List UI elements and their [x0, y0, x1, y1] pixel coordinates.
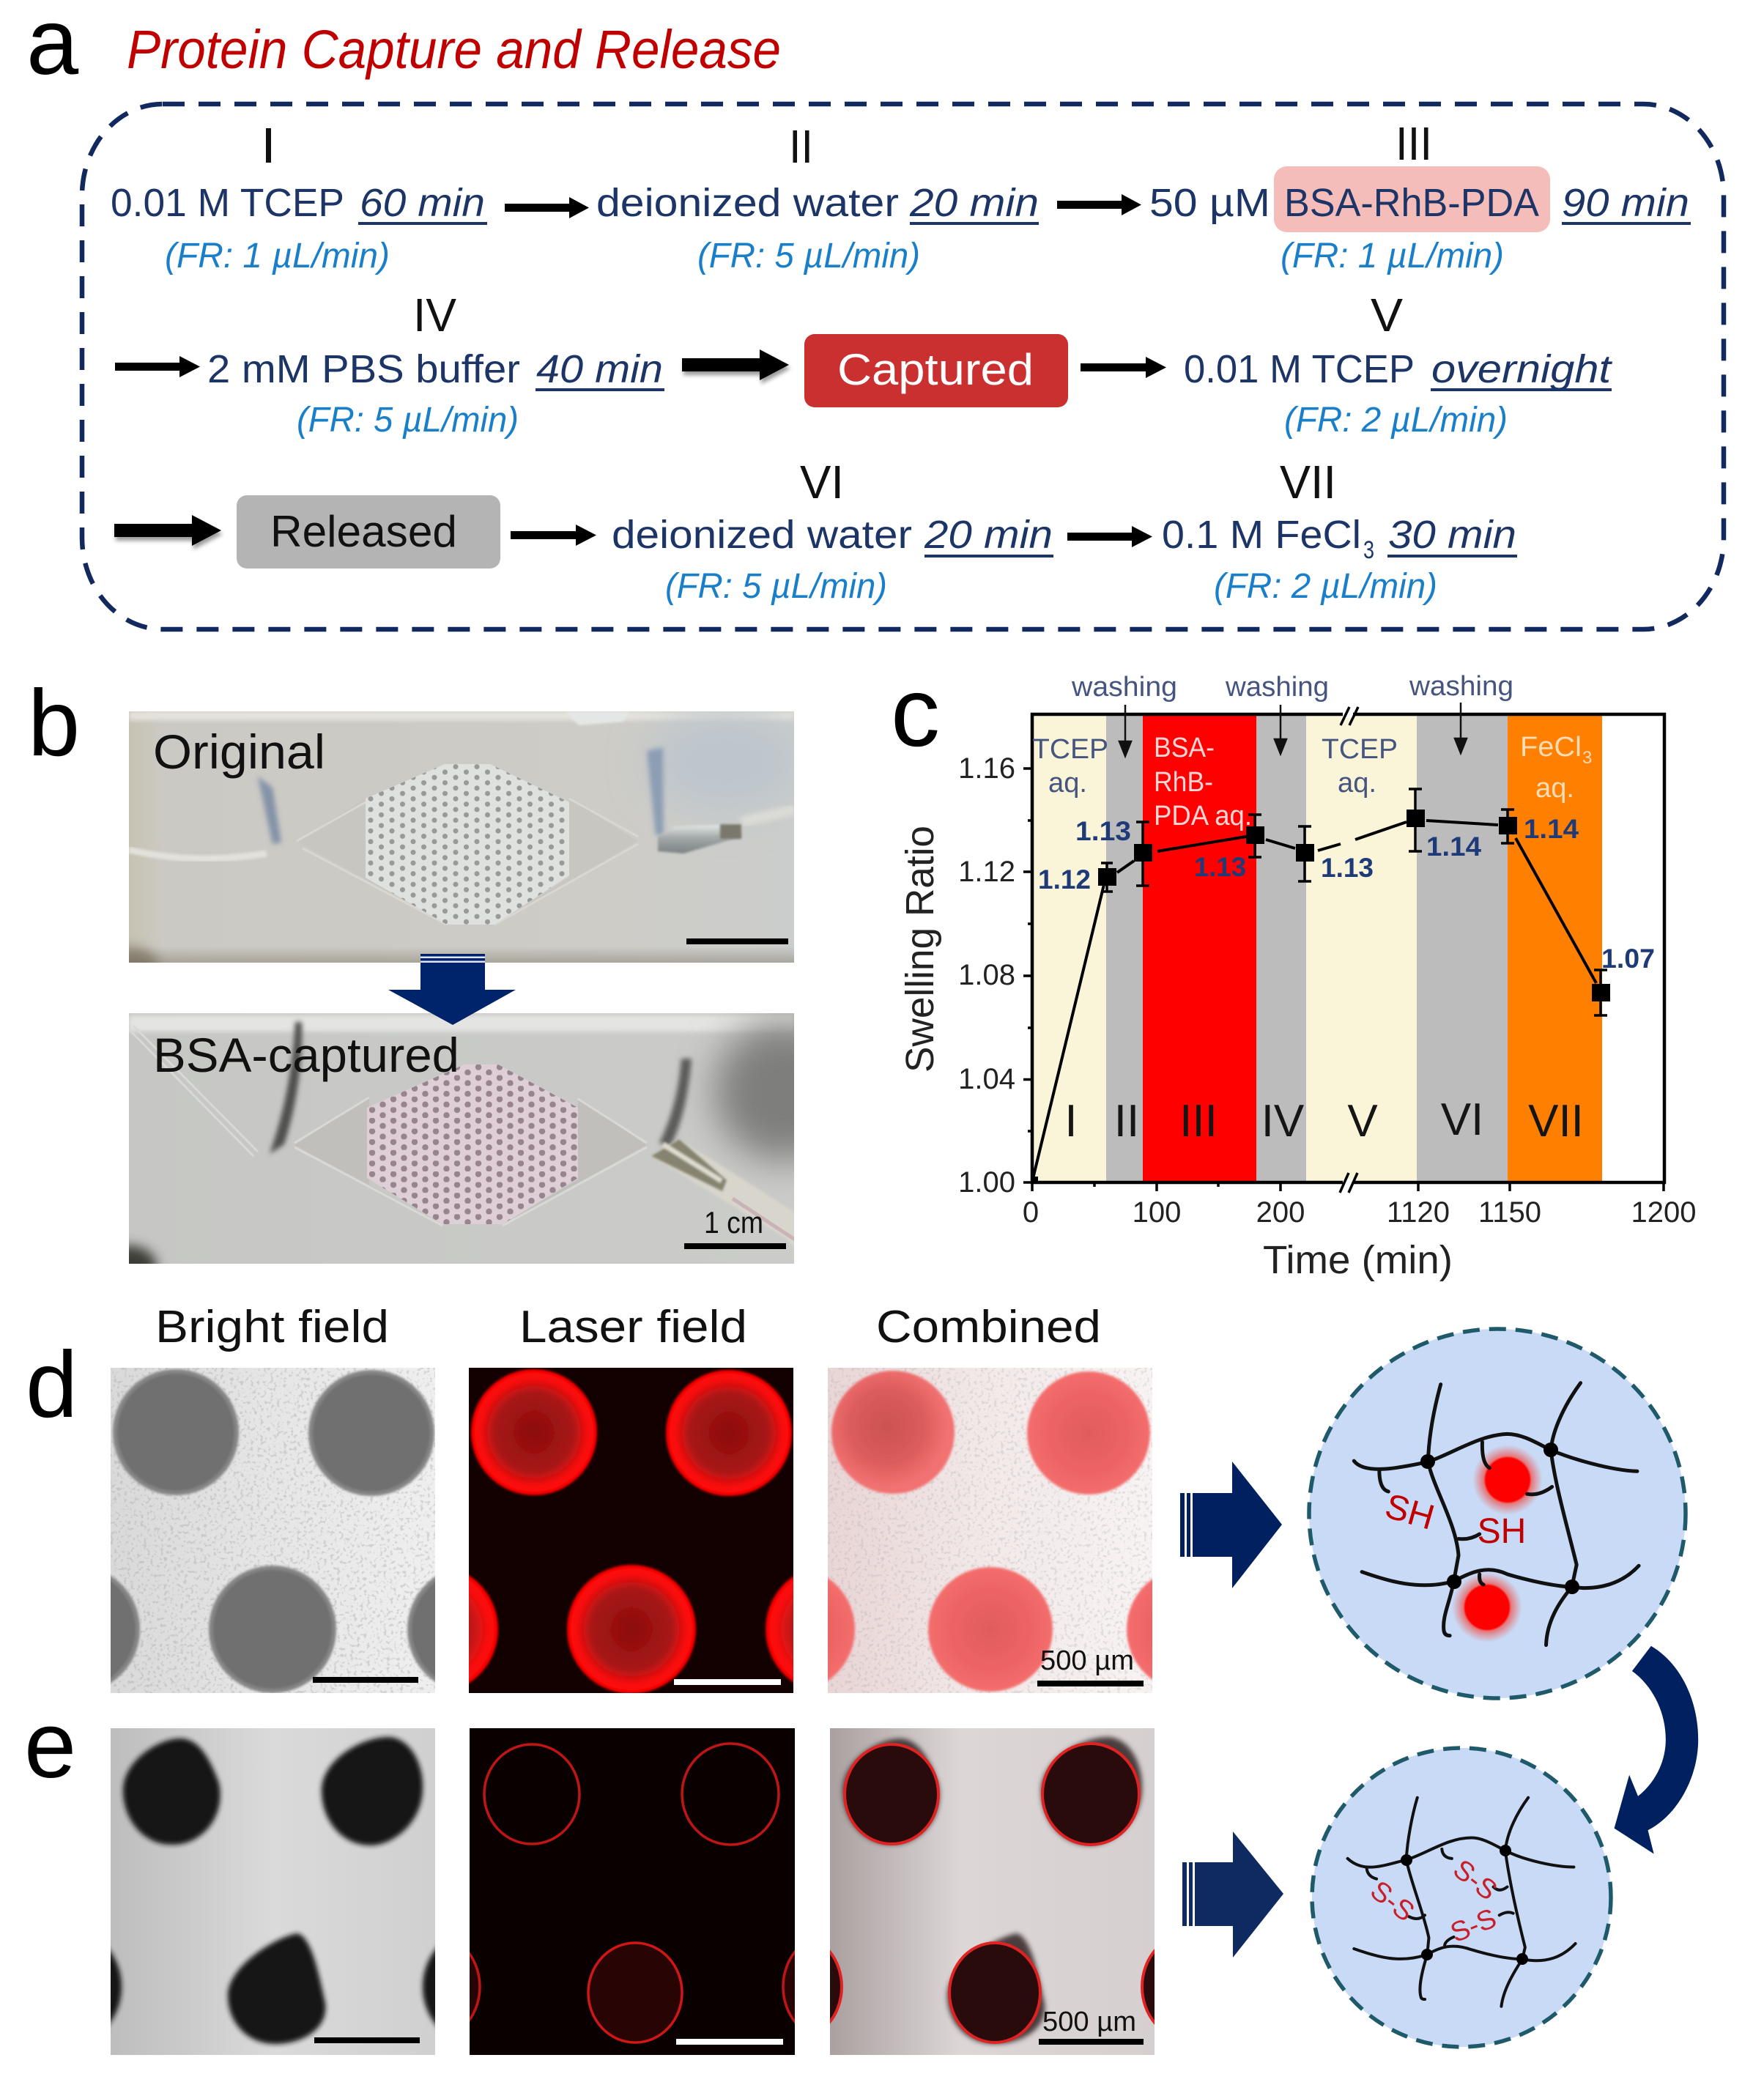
x axis tick labels: 0: [1023, 1196, 1039, 1229]
scale bar: [686, 938, 788, 944]
data value labels: 1.13: [1194, 852, 1246, 882]
y axis tick labels: 1.04: [958, 1063, 1015, 1095]
step VI: (FR: 5 µL/min): [665, 567, 887, 606]
step II: deionized water: [596, 181, 899, 225]
network circle: [1309, 1329, 1686, 1698]
y axis title: Swelling Ratio: [898, 826, 942, 1073]
step II: (FR: 5 µL/min): [697, 237, 920, 275]
polymer chains: [1348, 1798, 1576, 2007]
y axis tick labels: 1.16: [958, 752, 1015, 785]
band annotations: TCEP: [1032, 734, 1108, 765]
thiol label 1: SH: [1381, 1486, 1439, 1538]
panel b: device photographs: [28, 671, 853, 1286]
arrow to V: [1081, 357, 1166, 378]
data value labels: 1.12: [1038, 864, 1091, 895]
arrow to VI: [511, 525, 596, 546]
step III: [1149, 117, 1691, 275]
protein glow 2: [1452, 1572, 1522, 1642]
step IV: (FR: 5 µL/min): [297, 401, 519, 440]
stage numerals: VI: [1441, 1095, 1483, 1145]
stage numerals: I: [1064, 1096, 1078, 1147]
thiol label 2: SH: [1478, 1512, 1526, 1551]
step I: (FR: 1 µL/min): [165, 237, 390, 275]
panel label e: e: [24, 1693, 76, 1798]
stage numerals: III: [1179, 1096, 1218, 1147]
data value labels: 1.07: [1601, 944, 1655, 974]
step IV: 40 min: [536, 347, 663, 391]
column header: Bright field: Bright field: [155, 1302, 389, 1352]
step V: (FR: 2 µL/min): [1284, 401, 1508, 440]
network circle: [1312, 1748, 1611, 2047]
step VI: deionized water: [612, 513, 912, 557]
data value labels: 1.13: [1321, 853, 1374, 883]
polymer chains: [1354, 1383, 1639, 1645]
step III: III: [1396, 117, 1432, 170]
step VII: 3: [1363, 536, 1374, 564]
thick arrow to Captured: [682, 349, 789, 380]
step III: 90 min: [1562, 181, 1689, 225]
scale bar: [314, 2037, 420, 2043]
x axis tick labels: 1150: [1478, 1196, 1541, 1229]
data value labels: 1.14: [1426, 832, 1481, 862]
step I: 0.01 M TCEP: [111, 181, 344, 225]
band annotations: aq.: [1048, 768, 1087, 799]
disulfide label 2: S-S: [1447, 1853, 1502, 1907]
step IV: 2 mM PBS buffer: [207, 347, 520, 391]
stage numerals: IV: [1261, 1096, 1305, 1147]
y axis tick labels: 1.12: [958, 856, 1015, 888]
scale bar: [1039, 2039, 1144, 2045]
arrow into IV: [115, 356, 200, 377]
scale bar: [1037, 1681, 1144, 1686]
x axis title: Time (min): [1263, 1238, 1453, 1282]
scale bar: [684, 1243, 786, 1249]
Captured badge: Captured: [837, 345, 1034, 394]
label: Original: Original: [153, 725, 325, 779]
column header: Combined: Combined: [876, 1302, 1101, 1352]
stage numerals: [1064, 1095, 1584, 1147]
data series: [1032, 789, 1610, 1182]
y axis tick labels: [958, 752, 1015, 1199]
x axis tick labels: 100: [1133, 1196, 1181, 1229]
micrograph: bright field d: [111, 1368, 435, 1693]
step V: [1184, 289, 1612, 440]
Released badge: Released: [270, 507, 457, 556]
data value labels: [1038, 814, 1655, 974]
schematic: swollen network with captured protein: [1309, 1329, 1686, 1698]
crosslink nodes: [1401, 1845, 1528, 1965]
curved arrow: oxidation to disulfide: [1615, 1646, 1698, 1853]
scale bar: [674, 1679, 781, 1685]
photo: original device: [129, 711, 794, 963]
washing callouts: washing: [1225, 672, 1329, 703]
micrograph: laser field e: [470, 1728, 795, 2055]
step III: BSA-RhB-PDA: [1284, 181, 1539, 225]
band annotations: aq.: [1535, 773, 1574, 804]
stage numerals: VII: [1528, 1096, 1584, 1147]
column header: Laser field: Laser field: [519, 1302, 747, 1352]
micrograph: combined e: [830, 1728, 1155, 2055]
scale bar: [313, 1677, 418, 1683]
step II: II: [789, 120, 813, 173]
step VI: [612, 456, 1053, 606]
step VII: VII: [1280, 456, 1336, 508]
panel label d: d: [26, 1333, 78, 1437]
band annotations: [1032, 732, 1592, 832]
stage numerals: II: [1114, 1096, 1139, 1147]
step VI: 20 min: [924, 513, 1053, 557]
arrow: row d to network: [1180, 1462, 1282, 1588]
band annotations: aq.: [1338, 768, 1376, 799]
step VII: (FR: 2 µL/min): [1214, 567, 1437, 606]
x axis tick labels: [1023, 1196, 1696, 1229]
Captured badge: [804, 334, 1068, 407]
disulfide label 3: S-S: [1446, 1903, 1501, 1949]
panel a: protein capture and release workflow: [26, 0, 1724, 629]
step VII: [1162, 456, 1517, 606]
step IV: [207, 289, 664, 440]
band annotations: 3: [1582, 748, 1592, 768]
y axis tick labels: 1.08: [958, 959, 1015, 991]
band annotations: TCEP: [1322, 734, 1398, 765]
title: Protein Capture and Release: [127, 19, 781, 80]
panel d: captured micrographs: [15, 1333, 1251, 1694]
disulfide label 1: S-S: [1364, 1875, 1420, 1928]
band annotations: FeCl: [1520, 732, 1582, 763]
x axis tick labels: 1200: [1631, 1196, 1696, 1229]
step VI: VI: [800, 456, 844, 508]
thick arrow to Released: [114, 515, 221, 546]
step V: V: [1371, 289, 1403, 341]
arrow to VII: [1067, 526, 1152, 547]
panel label c: c: [891, 658, 940, 767]
step II: [596, 120, 1039, 275]
dashed workflow frame: [82, 104, 1724, 629]
washing callouts: [1071, 671, 1513, 756]
stage numerals: V: [1347, 1096, 1378, 1147]
micrograph: combined d: [828, 1368, 1152, 1693]
schematic: contracted network with disulfide bonds: [1312, 1748, 1611, 2047]
y axis tick labels: 1.00: [958, 1166, 1015, 1199]
crosslink nodes: [1420, 1442, 1579, 1594]
label: BSA-captured: BSA-captured: [153, 1028, 459, 1082]
step VII: 0.1 M FeCl: [1162, 513, 1361, 557]
band annotations: RhB-: [1154, 767, 1213, 798]
scale label: 500 µm: [1042, 2007, 1136, 2037]
data value labels: 1.13: [1075, 816, 1131, 846]
step V: 0.01 M TCEP: [1184, 347, 1415, 391]
arrow: original to captured: [388, 954, 516, 1025]
washing callouts: washing: [1409, 671, 1513, 702]
step I: [111, 128, 487, 275]
photo: BSA-captured device: [129, 1013, 794, 1264]
panel e: released micrographs: [24, 1693, 1236, 2055]
scale bar: [676, 2039, 783, 2045]
step II: 20 min: [909, 181, 1039, 225]
washing callouts: washing: [1071, 672, 1177, 703]
panel label b: b: [28, 671, 80, 776]
band annotations: BSA-: [1154, 733, 1215, 763]
micrograph: laser field d: [469, 1368, 793, 1693]
step IV: IV: [413, 289, 456, 341]
arrow II to III: [1057, 194, 1141, 215]
step III: 50 µM: [1149, 181, 1270, 225]
label: scale bar 1 cm: 1 cm: [704, 1205, 763, 1240]
arrow: row e to network: [1182, 1832, 1283, 1958]
step VII: 30 min: [1388, 513, 1516, 557]
micrograph: bright field e: [111, 1728, 435, 2055]
arrow I to II: [505, 197, 589, 218]
Released badge: [237, 495, 500, 569]
data value labels: 1.14: [1524, 814, 1579, 844]
protein glow 1: [1472, 1445, 1543, 1515]
band annotations: PDA aq.: [1154, 801, 1252, 832]
stage bands: [1032, 714, 1602, 1182]
x axis tick labels: 200: [1256, 1196, 1305, 1229]
step V: overnight: [1431, 347, 1612, 391]
step III: (FR: 1 µL/min): [1281, 237, 1504, 275]
plot frame and ticks: [1023, 707, 1664, 1193]
panel c: swelling ratio chart: [891, 658, 1696, 1282]
step I: 60 min: [360, 181, 485, 225]
x axis tick labels: 1120: [1387, 1196, 1450, 1229]
scale label: 500 µm: [1040, 1645, 1134, 1676]
